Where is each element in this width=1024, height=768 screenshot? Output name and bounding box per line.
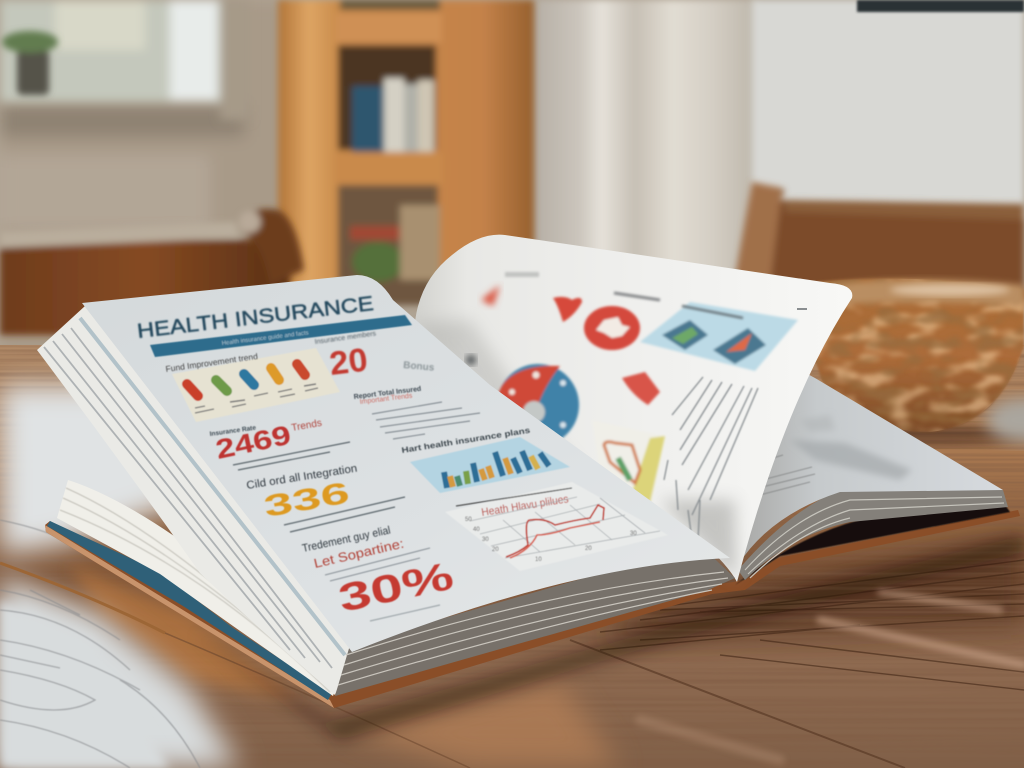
plank gaps	[0, 563, 905, 768]
right page stack	[738, 490, 1008, 580]
axis labels: 30	[482, 537, 489, 543]
headings	[505, 272, 743, 318]
axis labels: 20	[585, 546, 592, 552]
medical cross badge	[584, 306, 640, 350]
red shield icon	[622, 372, 660, 405]
slanted dark grain lines	[600, 560, 1024, 690]
stat: 20: Bonus	[403, 360, 435, 374]
wooden table	[0, 345, 1024, 768]
axis labels: 50	[465, 517, 472, 523]
pie chart	[497, 364, 579, 446]
title banner	[150, 315, 412, 357]
stat: 20	[314, 330, 435, 382]
stat: 20: 20	[327, 341, 370, 382]
pill chart panel: Fund Improvement trend	[165, 351, 259, 374]
left chair	[0, 209, 304, 335]
right wall	[752, 0, 1024, 220]
right chair	[735, 182, 1024, 300]
chart grid	[470, 497, 660, 558]
left page surface	[82, 275, 730, 652]
text block: Report Total Insured	[353, 386, 422, 401]
axis labels	[465, 517, 637, 563]
stat: 2469: Trends	[291, 418, 323, 434]
pill chart panel	[165, 348, 340, 422]
bar chart panel	[401, 426, 570, 493]
axis labels: 10	[535, 557, 542, 563]
body text lines	[664, 377, 758, 540]
title: HEALTH INSURANCE	[136, 293, 375, 343]
plant and lower books	[350, 205, 440, 282]
left page edge stack	[37, 306, 352, 695]
blue panel with icons	[640, 302, 798, 371]
pill labels	[195, 384, 318, 413]
stat: 30 percent: 30%	[335, 555, 457, 621]
heart icon	[553, 297, 582, 322]
lower block of loose pages	[57, 480, 335, 696]
books	[352, 78, 434, 152]
stat: 30 percent: Tredement guy elial	[301, 524, 392, 555]
curled page content	[466, 272, 807, 540]
wicker basket	[816, 276, 1024, 432]
right lower page	[738, 370, 1003, 565]
wood grain noise	[0, 345, 1024, 630]
stat: 336	[246, 463, 405, 532]
bars	[444, 451, 549, 488]
basket shadow	[902, 421, 1024, 449]
picture frame	[857, 0, 1024, 12]
curled right page	[415, 235, 852, 582]
small red icon	[481, 285, 500, 306]
stat: 2469: Insurance Rate	[209, 425, 257, 438]
bleached light on the table top	[0, 385, 225, 555]
black gap above right cover	[735, 505, 1010, 585]
book shadow	[190, 535, 1024, 740]
window	[0, 0, 250, 120]
text block	[353, 386, 480, 439]
stat: 2469	[209, 418, 350, 470]
inner shadow along curl	[415, 320, 590, 480]
left wall and radiator	[0, 0, 290, 400]
open book	[37, 235, 1020, 708]
line chart panel	[445, 482, 668, 571]
stat: 336: Cild ord all Integration	[246, 463, 358, 492]
stat: 2469: 2469	[213, 420, 294, 465]
yellow figure illustration	[592, 420, 665, 503]
coloured pills	[187, 364, 305, 396]
stat: 20: Insurance members	[314, 330, 377, 346]
basket rim	[800, 280, 1024, 305]
stat: 30 percent	[301, 524, 457, 621]
dark wood zone beside the book	[600, 540, 1024, 640]
text block: Important Trends	[359, 393, 413, 406]
axis labels: 30	[630, 531, 637, 537]
dark dot on curled page	[466, 355, 476, 365]
wooden bookshelf	[278, 0, 534, 305]
bleached light below the plank gap	[0, 575, 240, 768]
highlights on the right planks	[640, 592, 1024, 760]
grey object right of basket	[986, 398, 1024, 442]
axis labels: 20	[492, 547, 499, 553]
book cover	[45, 510, 1020, 708]
plant on window sill	[2, 31, 58, 95]
solid bleached area at bottom left	[0, 600, 170, 768]
bar chart panel: Hart health insurance plans	[401, 426, 531, 455]
axis labels: 40	[473, 527, 480, 533]
page stack below left page	[335, 545, 735, 696]
line chart panel: Heath Hlavu plilues	[481, 493, 570, 519]
shadow at spine of curled page	[660, 500, 737, 582]
wicker weave blobs	[816, 279, 1024, 432]
stat: 336: 336	[261, 476, 352, 524]
title banner: Health insurance guide and facts	[222, 330, 309, 347]
warm orange patch by the cover	[70, 565, 300, 700]
right-page margin number	[797, 308, 807, 310]
curtain	[535, 0, 757, 295]
stat: 30 percent: Let Sopartine:	[312, 536, 405, 571]
left page content	[136, 293, 668, 621]
warm patch in front of the book	[340, 680, 620, 768]
red line series	[506, 505, 604, 558]
grey grain in bleached area	[0, 520, 200, 768]
blurred room background	[0, 0, 1024, 400]
